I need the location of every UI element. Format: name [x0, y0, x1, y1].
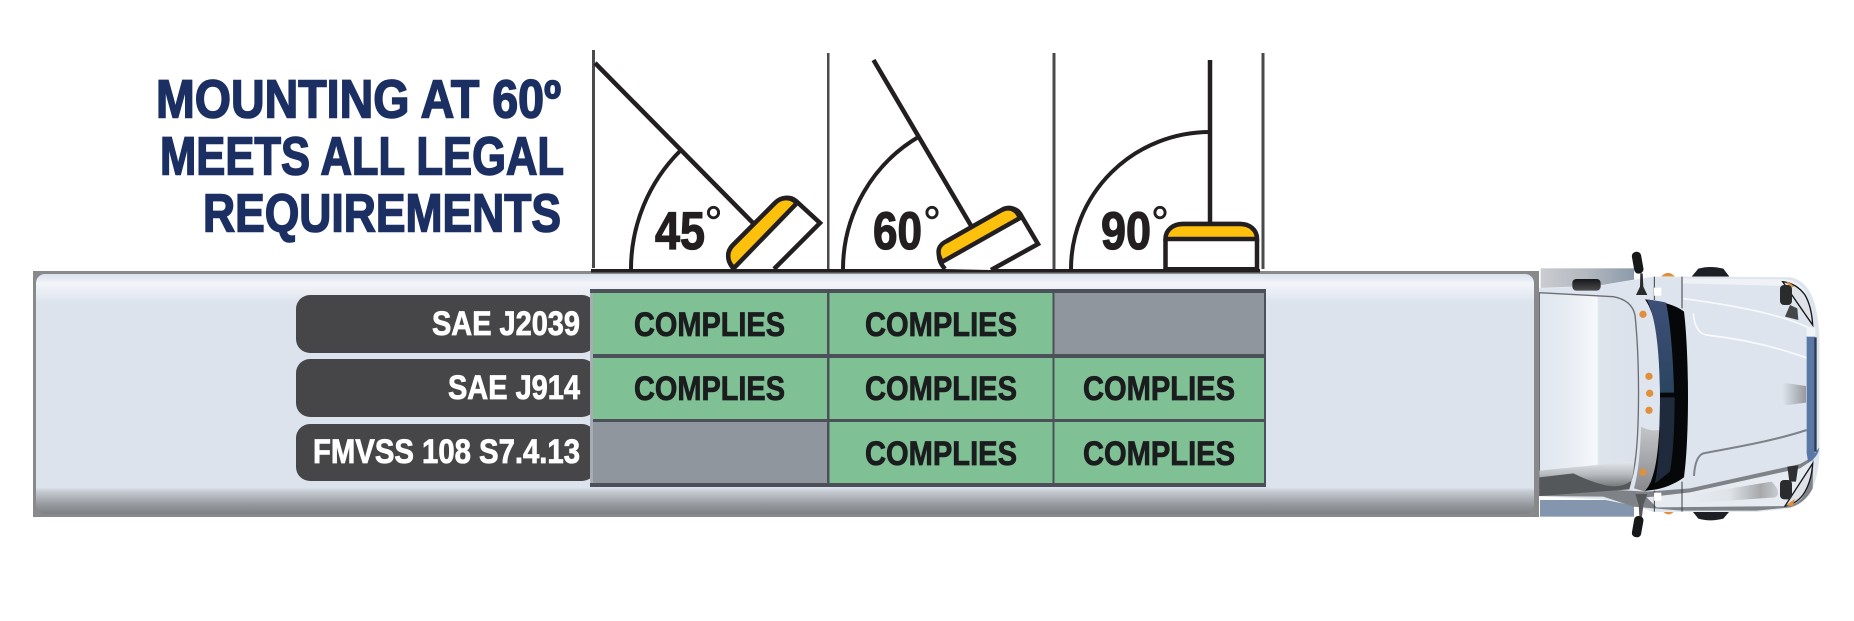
45 degree label: 45	[655, 202, 705, 261]
bumper dark edge	[1814, 337, 1817, 452]
heading: mounting at 60 degrees: MOUNTING AT 60º	[156, 70, 561, 130]
60 degree beam line	[874, 60, 973, 229]
complies text	[634, 306, 1235, 473]
mirror bottom	[1631, 494, 1647, 538]
truck cab top view	[1539, 251, 1819, 538]
trailer body	[36, 274, 1534, 514]
lower side panel gradient	[1690, 482, 1778, 503]
diagram: 45 degree mounting	[595, 63, 820, 269]
cab body	[1539, 277, 1819, 512]
90 degree beam line	[1208, 60, 1212, 224]
label: SAE J2039	[296, 295, 596, 353]
heading: mounting at 60 degrees: MEETS ALL LEGAL	[160, 128, 564, 186]
diagram: 60 degree mounting	[843, 60, 1038, 270]
ground line	[591, 269, 1260, 272]
row FMVSS cells	[593, 422, 1264, 483]
door lines	[1654, 277, 1682, 512]
headlight bottom	[1780, 463, 1813, 506]
sleeper dark contour	[1539, 473, 1632, 496]
wheels	[1692, 267, 1729, 520]
90 degree lamp	[1166, 224, 1257, 271]
45 degree label: °	[704, 197, 722, 248]
45 degree arc	[631, 151, 680, 269]
sleeper lower shading	[1539, 462, 1634, 489]
lower body shadow line	[1539, 457, 1813, 511]
mirror top	[1631, 251, 1647, 295]
trailer outer frame	[33, 271, 1539, 517]
front bumper blue	[1807, 337, 1819, 463]
amber roof lights	[1639, 311, 1653, 476]
column divider lines	[592, 50, 1264, 269]
complies text: COMPLIES	[1083, 435, 1235, 473]
45 degree lamp	[728, 198, 820, 269]
side step	[1572, 279, 1601, 291]
complies text: COMPLIES	[865, 370, 1017, 408]
top and bottom marker lights	[1660, 273, 1676, 514]
60 degree label: °	[923, 197, 941, 248]
45 degree beam line	[595, 63, 754, 224]
heading: mounting at 60 degrees	[156, 70, 564, 244]
hood highlights	[1683, 299, 1814, 361]
label: FMVSS 108 S7.4.13: FMVSS 108 S7.4.13	[313, 433, 580, 471]
mud flap panels	[1540, 268, 1634, 517]
label: FMVSS 108 S7.4.13	[296, 424, 596, 481]
complies text: COMPLIES	[1083, 370, 1235, 408]
door white squares	[1654, 288, 1661, 501]
compliance table	[590, 289, 1266, 487]
label: SAE J914: SAE J914	[448, 369, 580, 407]
60 degree label: 60	[873, 202, 922, 261]
headlight top	[1780, 282, 1815, 337]
label: SAE J2039: SAE J2039	[432, 305, 580, 343]
fairing lower gray	[1634, 427, 1659, 492]
90 degree arc	[1071, 132, 1210, 269]
90 degree label: 90	[1101, 202, 1151, 261]
complies text: COMPLIES	[634, 306, 785, 344]
complies text: COMPLIES	[865, 435, 1017, 473]
diagram: 90 degree mounting	[1071, 60, 1257, 271]
hood top strip	[1683, 278, 1807, 295]
sleeper roof	[1539, 293, 1639, 488]
hood vent	[1783, 383, 1806, 406]
lower hood panel	[1647, 460, 1813, 507]
roof fairing	[1633, 300, 1659, 492]
complies text: COMPLIES	[865, 306, 1017, 344]
windshield blue strip lower	[1655, 397, 1675, 483]
label: SAE J914	[296, 359, 596, 417]
row SAE J914 cells	[593, 358, 1264, 419]
row SAE J2039 cells	[593, 293, 1264, 354]
60 degree lamp	[939, 208, 1038, 270]
windshield	[1645, 299, 1688, 491]
hood crease	[1694, 430, 1807, 476]
60 degree arc	[843, 136, 920, 269]
heading: mounting at 60 degrees: REQUIREMENTS	[203, 184, 561, 244]
windshield blue strip upper	[1647, 299, 1674, 393]
90 degree label: °	[1151, 197, 1169, 248]
complies text: COMPLIES	[634, 370, 785, 408]
